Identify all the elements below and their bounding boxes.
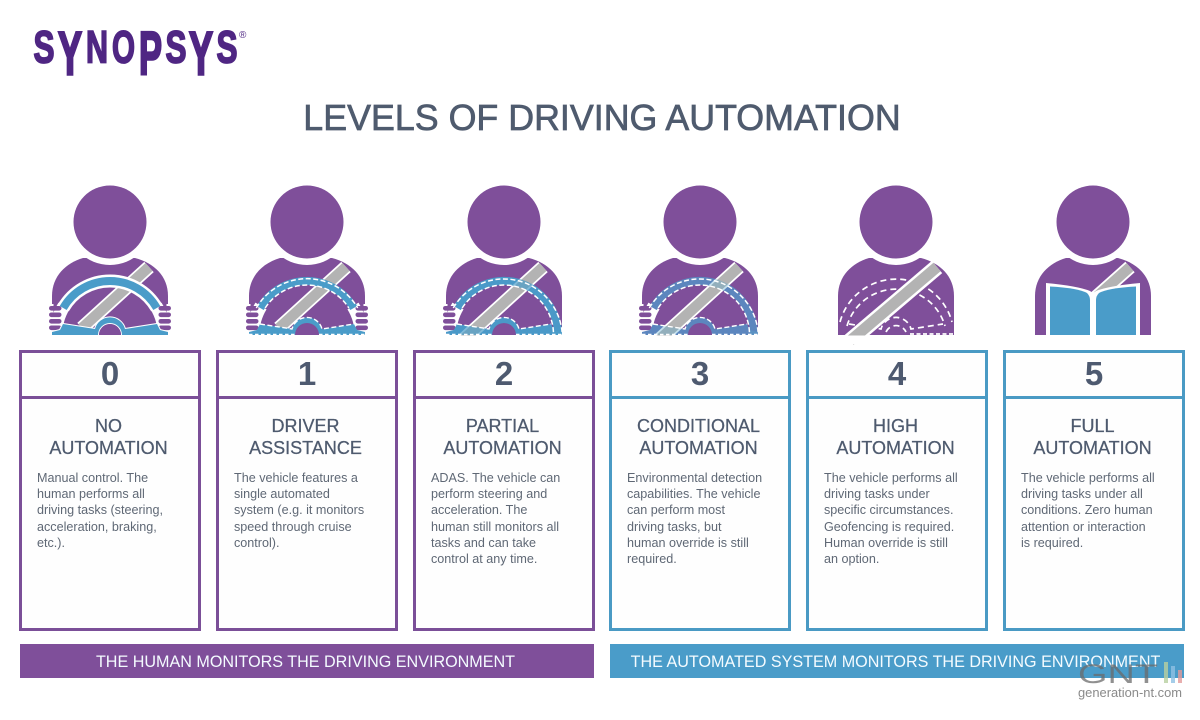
description: level 2: ADAS. The vehicle can [431,471,560,485]
level number 0 [22,353,198,399]
description: level 2: perform steering and [431,487,547,501]
level number 4: 4 [888,355,906,392]
logo: S [166,22,186,72]
description: level 2: human still monitors all [431,520,559,534]
description: level 3: driving tasks, but [627,520,722,534]
description: level 1: control). [234,536,280,550]
description: level 0: acceleration, braking, [37,520,157,534]
description: level 4: an option. [824,552,879,566]
description: level 2: tasks and can take [431,536,536,550]
description: level 4: Geofencing is required. [824,520,954,534]
panel: level 2 [413,350,595,631]
description: level 0: Manual control. The [37,471,148,485]
description: level 5: driving tasks under all [1021,487,1143,501]
heading: no automation: AUTOMATION [49,438,168,458]
description: level 1: single automated [234,487,330,501]
description: level 5: is required. [1021,536,1083,550]
heading: no automation [49,416,168,458]
description: level 3: human override is still [627,536,749,550]
description: level 4: Human override is still [824,536,948,550]
description: level 3: can perform most [627,503,725,517]
banner: human monitors: THE HUMAN MONITORS THE DRIVING ENVIRONMENT [96,653,515,671]
logo: P [139,20,162,88]
description: level 5: attention or interaction [1021,520,1146,534]
description: level 0: etc.). [37,536,65,550]
description: level 3: required. [627,552,677,566]
level number 2 [416,353,592,399]
heading: high automation [836,416,955,458]
heading: conditional automation [637,416,760,458]
description: level 3: Environmental detection [627,471,762,485]
description: level 4: The vehicle performs all [824,471,958,485]
icon: level 5 driver reading a book [1035,179,1151,336]
description: level 0: human performs all [37,487,145,501]
panel: level 5 [1003,350,1185,631]
description: level 3: capabilities. The vehicle [627,487,760,501]
heading: no automation: NO [95,416,122,436]
description: level 0 [37,471,163,550]
heading: conditional automation: AUTOMATION [639,438,758,458]
icon: level 2 driver, one hand, belt over wheel [442,179,566,344]
icon: level 3 driver, fading wheel [638,179,762,344]
heading: driver assistance: ASSISTANCE [249,438,362,458]
description: level 1 [234,471,364,550]
banner: human monitors [20,644,594,678]
heading: driver assistance: DRIVER [271,416,340,436]
banner: automated system monitors: THE AUTOMATED SYSTEM MONITORS THE DRIVING ENVIRONMENT [631,653,1160,671]
driver icons [49,186,1151,345]
panel: level 1 [216,350,398,631]
description: level 0: driving tasks (steering, [37,503,163,517]
level number 1 [219,353,395,399]
watermark: GNT [1078,659,1158,689]
heading: full automation: AUTOMATION [1033,438,1152,458]
description: level 1: The vehicle features a [234,471,358,485]
description: level 5 [1021,471,1155,550]
description: level 5: conditions. Zero human [1021,503,1153,517]
description: level 2: control at any time. [431,552,537,566]
description: level 4: specific circumstances. [824,503,953,517]
logo: O [112,22,135,72]
heading: partial automation [443,416,562,458]
level number 2: 2 [495,355,513,392]
panel: level 4 [806,350,988,631]
heading: conditional automation: CONDITIONAL [637,416,760,436]
description: level 1: speed through cruise [234,520,352,534]
icon: level 4 driver, dashes only [834,179,958,344]
logo: ® [239,30,247,41]
heading: driver assistance [249,416,362,458]
level number 1: 1 [298,355,316,392]
title: LEVELS OF DRIVING AUTOMATION [303,98,901,138]
banner: automated system monitors [610,644,1184,678]
heading: full automation: FULL [1070,416,1114,436]
icon: level 0 driver with solid wheel [49,179,171,336]
description: level 2: acceleration. The [431,503,527,517]
level number 3: 3 [691,355,709,392]
description: level 3 [627,471,762,566]
description: level 2 [431,471,560,566]
panel: level 3 [609,350,791,631]
logo [34,20,247,88]
logo: Y [189,20,213,88]
description: level 4: driving tasks under [824,487,930,501]
level number 5: 5 [1085,355,1103,392]
heading: partial automation: PARTIAL [466,416,539,436]
watermark: generation-nt.com [1078,685,1182,700]
heading: full automation [1033,416,1152,458]
heading: high automation: AUTOMATION [836,438,955,458]
logo: S [216,22,238,72]
description: level 5: The vehicle performs all [1021,471,1155,485]
heading: high automation: HIGH [873,416,918,436]
level number 3 [612,353,788,399]
panel: level 0 [19,350,201,631]
description: level 1: system (e.g. it monitors [234,503,364,517]
level number 0: 0 [101,355,119,392]
logo: N [86,22,108,72]
logo: S [34,22,54,72]
icon: level 1 driver with dashed blue wheel [246,179,368,336]
heading: partial automation: AUTOMATION [443,438,562,458]
description: level 4 [824,471,958,566]
logo: Y [58,20,82,88]
level number 5 [1006,353,1182,399]
level number 4 [809,353,985,399]
